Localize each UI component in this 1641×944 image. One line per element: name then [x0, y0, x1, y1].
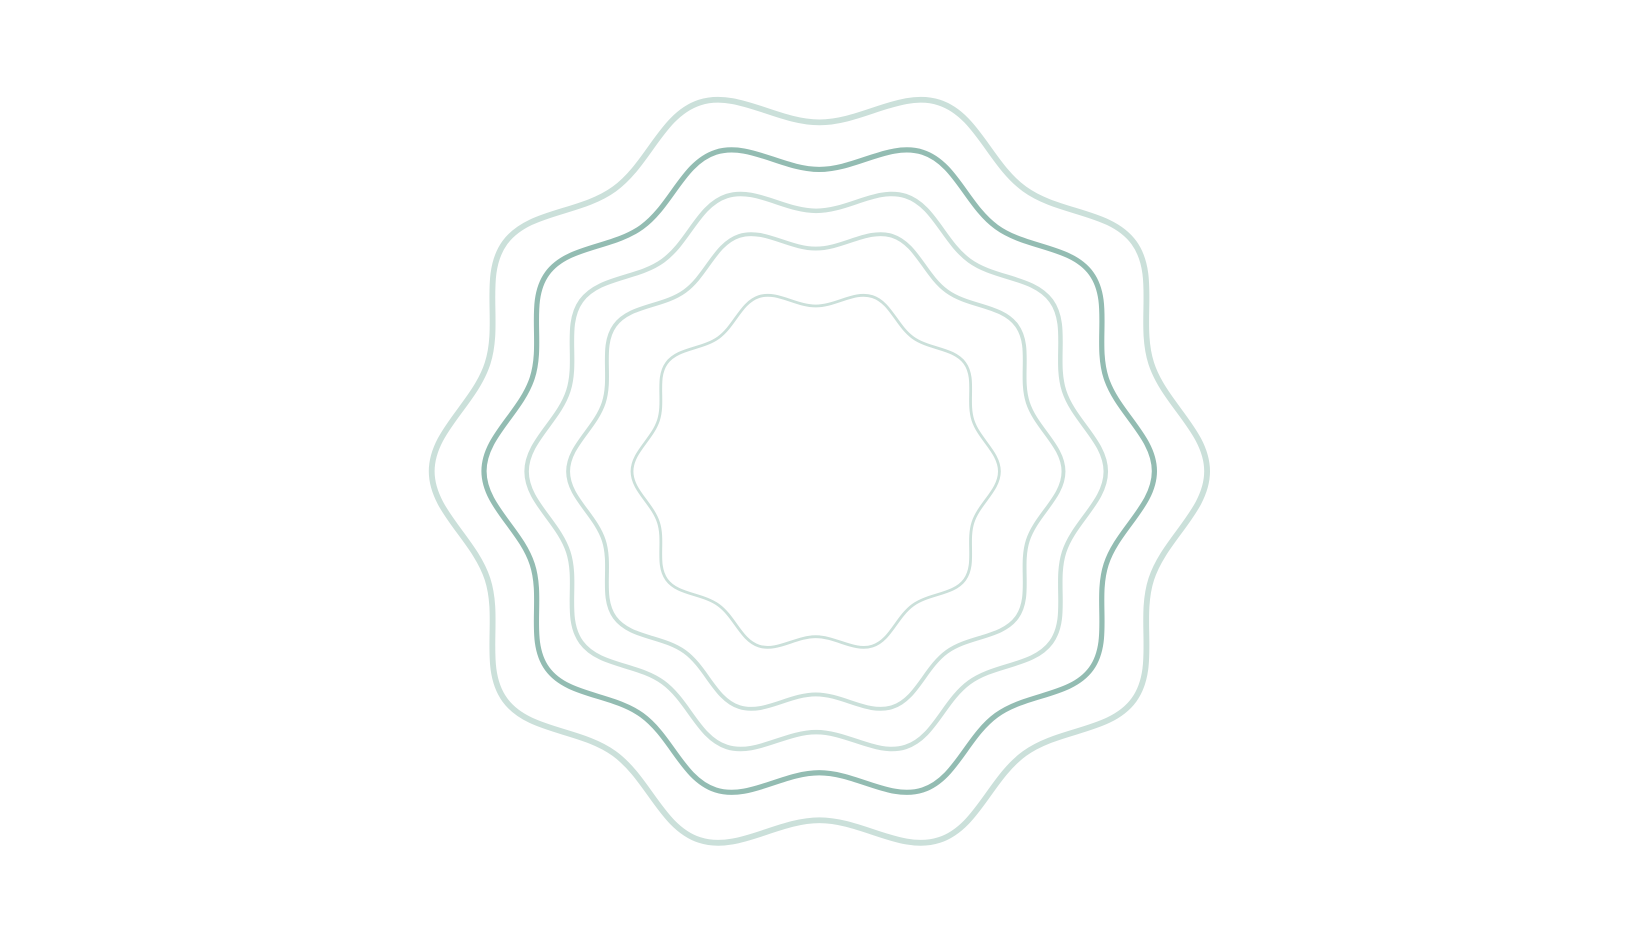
- ring 4: light wavy ring: [568, 234, 1064, 709]
- ring 2: dark teal wavy ring: [484, 150, 1154, 792]
- ring 1: outermost light wavy ring: [432, 100, 1207, 843]
- ring 5: innermost light wavy ring: [632, 295, 999, 647]
- ring 3: light wavy ring: [527, 194, 1106, 749]
